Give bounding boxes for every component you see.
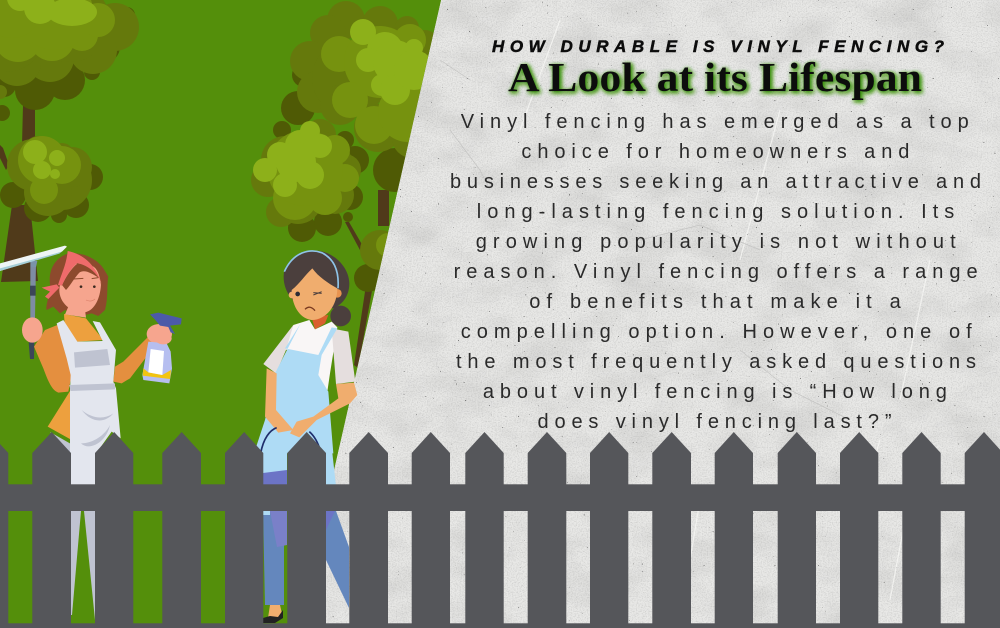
- eyebrow heading: HOW DURABLE IS VINYL FENCING?: [492, 37, 945, 56]
- fence: [0, 432, 1000, 628]
- body paragraph: long-lasting fencing solution. Its: [477, 201, 954, 223]
- blouse sleeves and arms: [263, 320, 355, 392]
- body paragraph: about vinyl fencing is “How long: [483, 381, 947, 403]
- legs and apron skirt behind fence: [50, 430, 95, 620]
- body paragraph: growing popularity is not without: [476, 231, 956, 253]
- body paragraph: reason. Vinyl fencing offers a range: [454, 261, 978, 283]
- apron: [57, 320, 121, 455]
- body paragraph: does vinyl fencing last?”: [538, 411, 892, 433]
- main title: A Look at its Lifespan: [508, 54, 922, 100]
- spray bottle: [142, 313, 182, 383]
- woman with squeegee and spray bottle: [0, 246, 182, 620]
- body paragraph: choice for homeowners and: [521, 141, 909, 163]
- body paragraph: compelling option. However, one of: [461, 321, 972, 343]
- apron: [254, 323, 337, 453]
- headband: [284, 251, 338, 288]
- concrete panel: [298, 0, 1000, 628]
- woman with apron and bucket: [254, 250, 357, 623]
- orange jacket: [34, 314, 157, 440]
- tree: center right foreground: [251, 119, 363, 242]
- hair: [284, 250, 351, 326]
- body paragraph: the most frequently asked questions: [456, 351, 976, 373]
- lower body behind fence: [263, 440, 349, 623]
- face: [289, 268, 342, 329]
- body paragraph: of benefits that make it a: [529, 291, 902, 313]
- body paragraph: Vinyl fencing has emerged as a top: [461, 111, 969, 133]
- head and hair: [42, 251, 108, 318]
- tree: top left: [0, 0, 139, 282]
- tree: top right behind concrete: [281, 1, 439, 368]
- bucket handle: [261, 428, 321, 453]
- tree: small lower left: [0, 136, 103, 223]
- squeegee: [0, 246, 67, 359]
- body paragraph: businesses seeking an attractive and: [450, 171, 981, 193]
- raised hand: [22, 317, 43, 343]
- body paragraph: [450, 111, 981, 433]
- arms: [265, 368, 357, 437]
